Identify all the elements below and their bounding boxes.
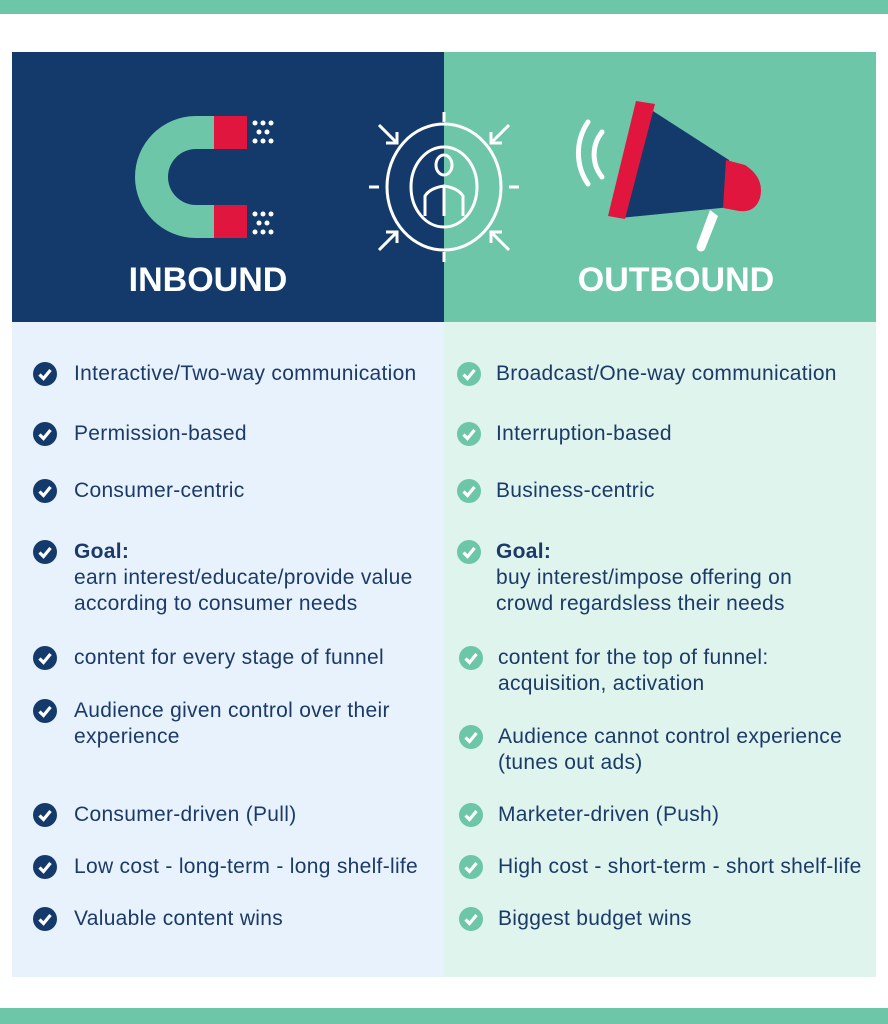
item: Goal:	[74, 540, 129, 563]
item: earn interest/educate/provide value	[74, 566, 413, 589]
item: Goal:	[496, 540, 551, 563]
panel: inbound list	[12, 322, 444, 977]
heading: INBOUND: INBOUND	[129, 261, 287, 299]
item: acquisition, activation	[498, 672, 705, 695]
item: according to consumer needs	[74, 592, 358, 615]
item: Audience cannot control experience	[498, 725, 842, 748]
item: buy interest/impose offering on	[496, 566, 792, 589]
icon: target person	[369, 112, 519, 262]
item	[457, 540, 792, 615]
item: Low cost - long-term - long shelf-life	[74, 855, 418, 878]
header panel	[12, 52, 876, 322]
heading: OUTBOUND: OUTBOUND	[578, 261, 774, 299]
item: Broadcast/One-way communication	[496, 362, 837, 385]
item: experience	[74, 725, 180, 748]
item	[33, 540, 413, 615]
icon: magnet	[135, 116, 274, 238]
item: Biggest budget wins	[498, 907, 692, 930]
item: Marketer-driven (Push)	[498, 803, 719, 826]
item: Interactive/Two-way communication	[74, 362, 417, 385]
item: High cost - short-term - short shelf-life	[498, 855, 862, 878]
item: Valuable content wins	[74, 907, 283, 930]
item: Permission-based	[74, 422, 247, 445]
item: Consumer-driven (Pull)	[74, 803, 296, 826]
item: Audience given control over their	[74, 699, 390, 722]
item: crowd regardsless their needs	[496, 592, 785, 615]
item: Interruption-based	[496, 422, 672, 445]
item: content for the top of funnel:	[498, 646, 769, 669]
item	[459, 725, 842, 774]
item: Consumer-centric	[74, 479, 245, 502]
item: Business-centric	[496, 479, 655, 502]
item	[33, 699, 390, 748]
panel: outbound list	[444, 322, 876, 977]
icon: megaphone	[578, 101, 761, 251]
item: content for every stage of funnel	[74, 646, 384, 669]
item: (tunes out ads)	[498, 751, 643, 774]
item	[459, 646, 769, 695]
